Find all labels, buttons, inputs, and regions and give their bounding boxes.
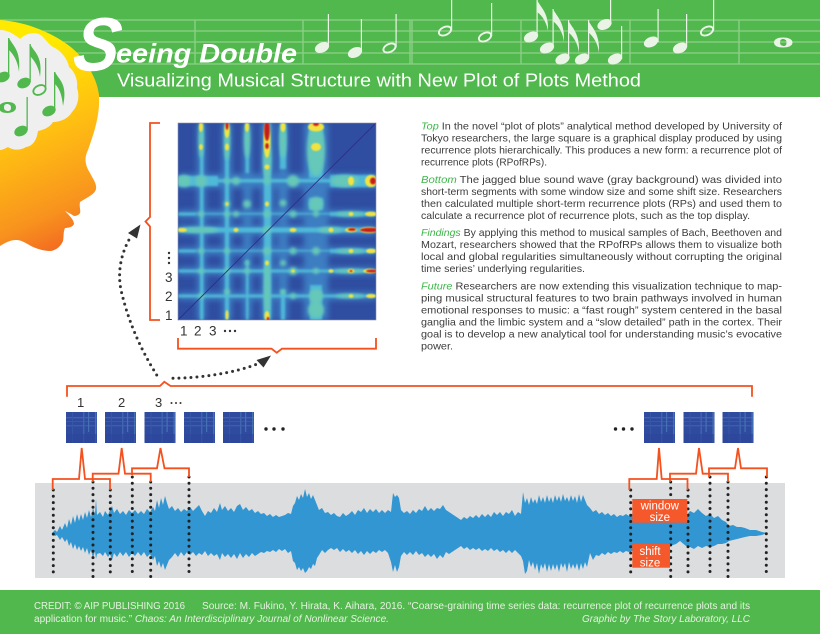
paragraph: bottom: then calculated multiple short-term recurrence plots (RPs) and used them to [421,198,782,210]
paragraph: future: Future Researchers are now extending this visualization technique to map- [421,280,783,292]
window size label: size [650,512,670,524]
header band [0,0,820,97]
axis labels on heatmap: 3 [209,324,217,338]
heatmap brackets [146,123,376,353]
heatmap intersections [177,120,366,320]
paragraph: findings: local and global regularities simultaneously without corrupting the original [421,251,782,263]
paragraph: top: Top In the novel “plot of plots” analytical method developed by University of [421,120,782,132]
heatmap red peaks [226,119,380,321]
music staff [0,20,820,64]
small recurrence plot numbers: 3 [155,395,162,410]
segment brackets right [629,448,767,490]
subtitle: Visualizing Musical Structure with New Plot of Plots Method [117,70,641,90]
paragraph: findings: Mozart, researchers showed that the RPofRPs allows them to visualize both [421,239,782,251]
window size label [632,499,687,524]
window size label: window [640,500,680,512]
footer credits: Source: M. Fukino, Y. Hirata, K. Aihara, 2016. “Coarse-graining time series data: recurrence plot of recurrence plots and its [202,601,750,612]
paragraph: findings [421,227,782,275]
small recurrence plot numbers: 2 [118,395,125,410]
musical notes [313,0,792,67]
axis labels on heatmap: 1 [165,308,173,323]
heatmap glow [178,123,376,320]
paragraph: future: goal is to develop a new analytical tool for understanding music’s evocative [421,328,782,340]
paragraph: top [421,120,782,168]
heatmap stripes [178,123,376,320]
axis labels on heatmap: 3 [165,270,173,285]
waveform segment dotted guide lines [53,477,766,577]
shift size label [632,544,670,570]
title [69,3,297,87]
brain [0,30,78,150]
footer credits: application for music.” Chaos: An Interdisciplinary Journal of Nonlinear Science. [34,614,389,625]
dotted arrow to horizontal axis [173,356,271,378]
top long bracket [67,382,752,397]
paragraph: bottom: short-term segments with some window size and some shift size. Researchers [421,186,782,198]
axis labels on heatmap: 2 [194,324,202,338]
explanatory text [421,120,783,352]
paragraph: future: ping musical structural features to two brain pathways involved in human [421,292,782,304]
segment brackets left [53,448,189,490]
head silhouette [0,20,99,251]
diagonal line [178,123,376,320]
axis labels on heatmap [165,252,236,338]
small recurrence plots row [66,412,754,443]
paragraph: top: recurrence plots (RPofRPs). [421,156,547,168]
title: S [69,3,127,87]
axis labels on heatmap: 1 [180,324,188,338]
footer band [0,590,820,634]
paragraph: bottom: Bottom The jagged blue sound wave (gray background) was divided into [421,174,782,186]
waveform background panel [35,483,785,578]
paragraph: findings: time series’ underlying regularities. [421,263,585,275]
paragraph: top: Tokyo researchers, the large square is a graphical display produced by using [421,132,782,144]
small recurrence plot numbers [77,395,182,410]
shift size label: shift [639,546,661,558]
sound waveform [52,489,767,574]
recurrence plot of recurrence plots heatmap [177,119,380,321]
axis labels on heatmap: 2 [165,289,173,304]
paragraph: future [421,280,783,352]
paragraph: future: ganglia and the limbic system and a “slow detailed” path in the cortex. Their [421,316,783,328]
paragraph: bottom [421,174,782,222]
footer credits: Graphic by The Story Laboratory, LLC [582,614,751,625]
shift size label: size [640,558,660,570]
footer credits [34,601,751,625]
small recurrence plot numbers: 1 [77,395,84,410]
brain notes [0,38,64,138]
heatmap yellow areas [177,122,378,321]
paragraph: bottom: calculate a recurrence plot of recurrence plots, such as the top display. [421,210,750,222]
paragraph: future: power. [421,340,453,352]
paragraph: future: emotional responses to music: a “fast rough” system centered in the basal [421,304,782,316]
paragraph: findings: Findings By applying this method to musical samples of Bach, Beethoven and [421,227,782,239]
footer credits: CREDIT: © AIP PUBLISHING 2016 [34,601,185,612]
paragraph: top: recurrence plots hierarchically. This produces a new form: a recurrence plot of [421,144,782,156]
dotted arrow to vertical axis [120,224,157,375]
title: eeing Double [116,38,297,68]
